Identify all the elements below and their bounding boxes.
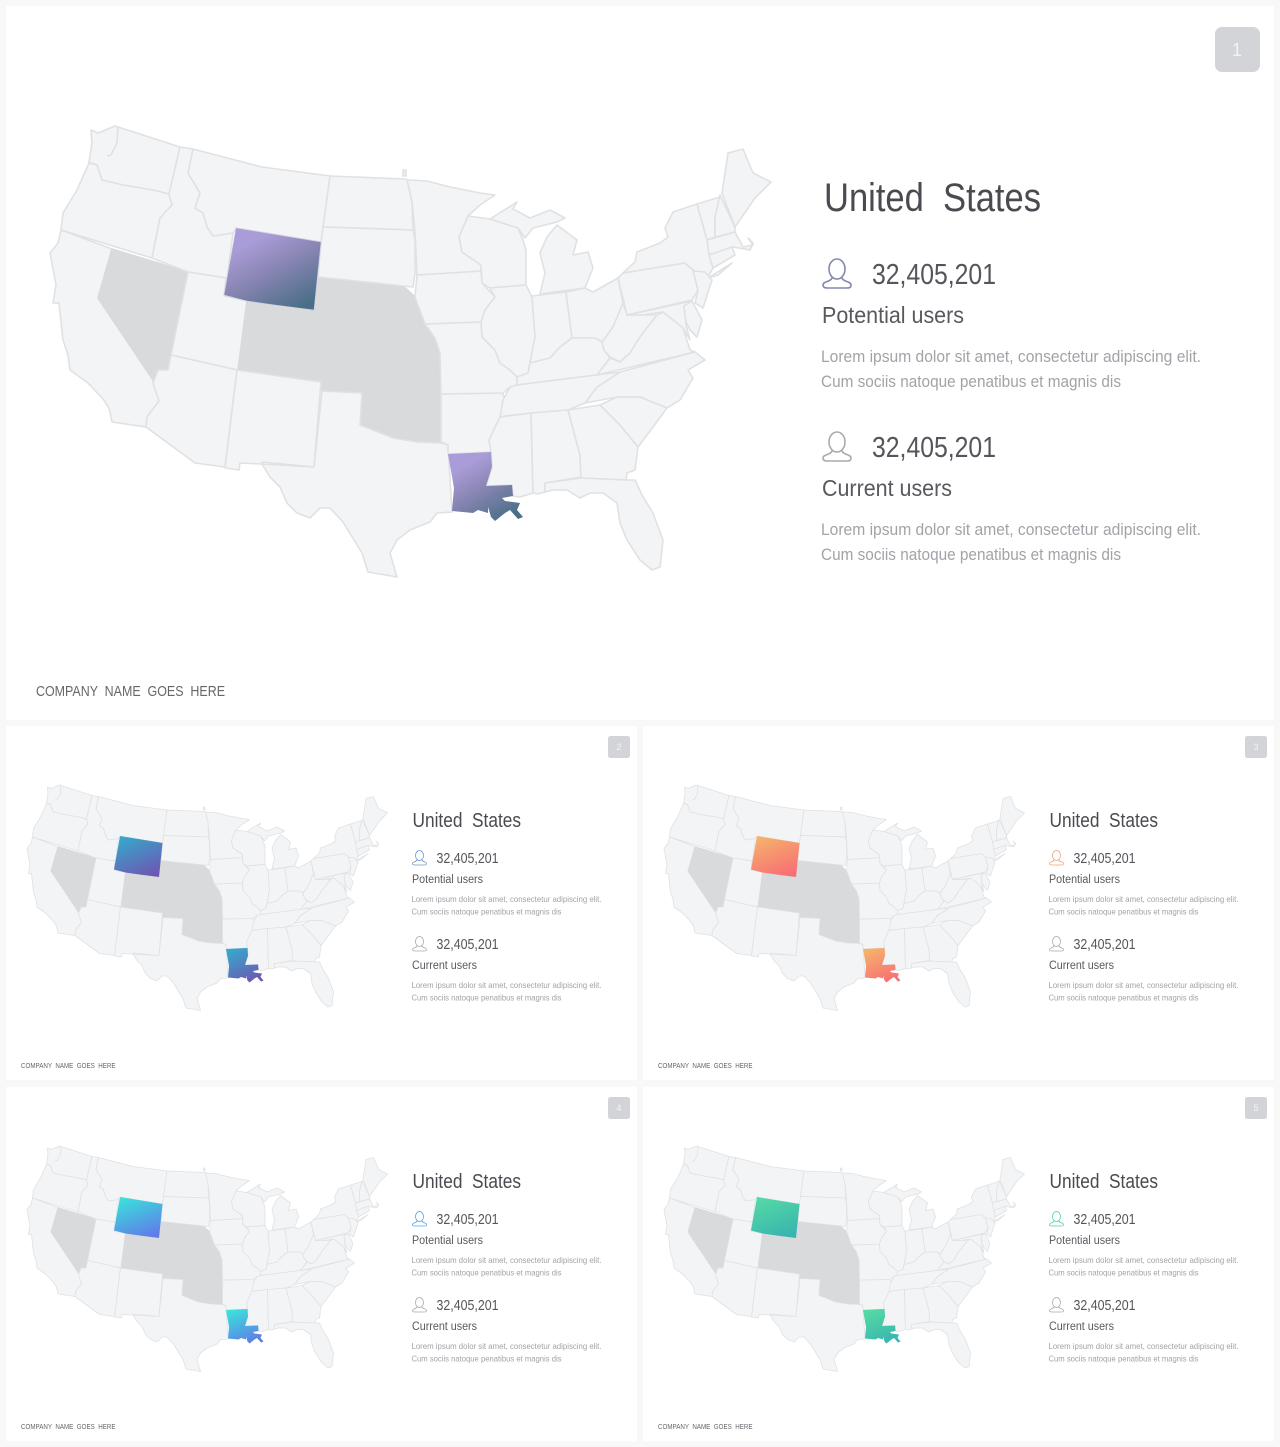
heading: potential users: Potential users: [412, 1235, 483, 1247]
stat: potential users number: 32,405,201: [436, 1212, 498, 1228]
badge: page number 2: [608, 736, 630, 758]
heading: potential users: Potential users: [1049, 1235, 1120, 1247]
panel: slide 4: [6, 1087, 637, 1441]
text block: current users description: Cum sociis natoque penatibus et magnis dis: [412, 992, 562, 1002]
map: United States: [50, 126, 771, 577]
text block: current users description: Cum sociis natoque penatibus et magnis dis: [1048, 992, 1198, 1002]
icon: potential users: [1050, 1212, 1064, 1226]
heading: current users: Current users: [1049, 1321, 1114, 1333]
icon: potential users: [823, 259, 851, 288]
badge: page number 1: [1215, 27, 1260, 72]
text block: potential users description: Cum sociis natoque penatibus et magnis dis: [412, 906, 562, 916]
badge: page number 3: 3: [1253, 742, 1259, 752]
heading: current users: Current users: [822, 475, 952, 501]
text block: potential users description: Cum sociis natoque penatibus et magnis dis: [821, 372, 1121, 391]
badge: page number 4: [608, 1097, 630, 1119]
state highlight: Wyoming: [751, 836, 800, 877]
stat: potential users number: 32,405,201: [436, 851, 498, 867]
stat: potential users number: 32,405,201: [872, 259, 996, 291]
panel: slide 5: [643, 1087, 1274, 1441]
heading: current users: Current users: [412, 960, 477, 972]
footer: company name: COMPANY NAME GOES HERE: [21, 1061, 116, 1070]
map: United States: [664, 1146, 1024, 1372]
heading: potential users: Potential users: [822, 302, 964, 328]
stat: current users number: 32,405,201: [1074, 937, 1136, 953]
footer: company name: COMPANY NAME GOES HERE: [658, 1422, 753, 1431]
state highlight: Louisiana: [863, 1309, 900, 1344]
state highlight: Louisiana: [448, 452, 523, 521]
text block: potential users description: Cum sociis natoque penatibus et magnis dis: [1048, 906, 1198, 916]
icon: potential users: [412, 850, 426, 865]
heading: potential users: Potential users: [412, 874, 483, 886]
state highlight: Wyoming: [224, 228, 321, 310]
badge: page number 5: 5: [1253, 1103, 1259, 1113]
badge: page number 3: [1245, 736, 1267, 758]
text block: current users description: Lorem ipsum dolor sit amet, consectetur adipiscing elit.: [412, 1341, 602, 1351]
panel: slide 3: [643, 726, 1274, 1080]
text block: current users description: Lorem ipsum dolor sit amet, consectetur adipiscing elit.: [1048, 1341, 1238, 1351]
state highlight: Wyoming: [751, 1197, 800, 1238]
text block: current users description: Cum sociis natoque penatibus et magnis dis: [821, 545, 1121, 564]
text block: potential users description: Lorem ipsum dolor sit amet, consectetur adipiscing elit.: [821, 347, 1201, 366]
icon: current users: [1050, 936, 1064, 951]
badge: page number 2: 2: [616, 742, 622, 752]
icon: current users: [412, 1298, 426, 1312]
map: United States: [664, 785, 1024, 1010]
footer: company name: COMPANY NAME GOES HERE: [36, 684, 225, 700]
badge: page number 4: 4: [616, 1103, 622, 1113]
map: United States: [27, 785, 388, 1010]
icon: potential users: [412, 1212, 426, 1226]
title: United States: [824, 176, 1041, 220]
text block: potential users description: Cum sociis natoque penatibus et magnis dis: [1048, 1268, 1198, 1278]
text block: potential users description: Lorem ipsum dolor sit amet, consectetur adipiscing elit.: [1048, 894, 1238, 904]
text block: current users description: Lorem ipsum dolor sit amet, consectetur adipiscing elit.: [1048, 980, 1238, 990]
state highlight: Wyoming: [114, 1197, 162, 1238]
text block: potential users description: Lorem ipsum dolor sit amet, consectetur adipiscing elit.: [412, 1255, 602, 1265]
title: United States: [1050, 1171, 1158, 1193]
state highlight: Louisiana: [863, 948, 900, 982]
state highlight: Wyoming: [114, 836, 162, 877]
icon: current users: [823, 432, 851, 461]
stat: potential users number: 32,405,201: [1074, 851, 1136, 867]
text block: current users description: Lorem ipsum dolor sit amet, consectetur adipiscing elit.: [412, 980, 602, 990]
text block: potential users description: Cum sociis natoque penatibus et magnis dis: [412, 1268, 562, 1278]
heading: current users: Current users: [412, 1321, 477, 1333]
title: United States: [412, 1171, 521, 1193]
footer: company name: COMPANY NAME GOES HERE: [21, 1422, 116, 1431]
title: United States: [412, 810, 521, 832]
text block: potential users description: Lorem ipsum dolor sit amet, consectetur adipiscing elit.: [412, 894, 602, 904]
icon: current users: [1050, 1298, 1064, 1312]
badge: page number 5: [1245, 1097, 1267, 1119]
stat: current users number: 32,405,201: [436, 1298, 498, 1314]
heading: potential users: Potential users: [1049, 874, 1120, 886]
stat: current users number: 32,405,201: [436, 937, 498, 953]
badge: page number 1: 1: [1232, 40, 1242, 60]
icon: potential users: [1050, 850, 1064, 865]
panel: slide 2: [6, 726, 637, 1080]
state highlight: Louisiana: [226, 948, 264, 982]
text block: current users description: Cum sociis natoque penatibus et magnis dis: [412, 1354, 562, 1364]
title: United States: [1050, 810, 1158, 832]
stat: potential users number: 32,405,201: [1074, 1212, 1136, 1228]
stat: current users number: 32,405,201: [1074, 1298, 1136, 1314]
panel: slide 1: [6, 6, 1274, 720]
map: United States: [27, 1146, 388, 1372]
text block: current users description: Cum sociis natoque penatibus et magnis dis: [1048, 1354, 1198, 1364]
icon: current users: [412, 936, 426, 951]
stat: current users number: 32,405,201: [872, 432, 996, 464]
text block: potential users description: Lorem ipsum dolor sit amet, consectetur adipiscing elit.: [1048, 1255, 1238, 1265]
text block: current users description: Lorem ipsum dolor sit amet, consectetur adipiscing elit.: [821, 520, 1201, 539]
footer: company name: COMPANY NAME GOES HERE: [658, 1061, 753, 1070]
heading: current users: Current users: [1049, 960, 1114, 972]
state highlight: Louisiana: [226, 1309, 264, 1344]
